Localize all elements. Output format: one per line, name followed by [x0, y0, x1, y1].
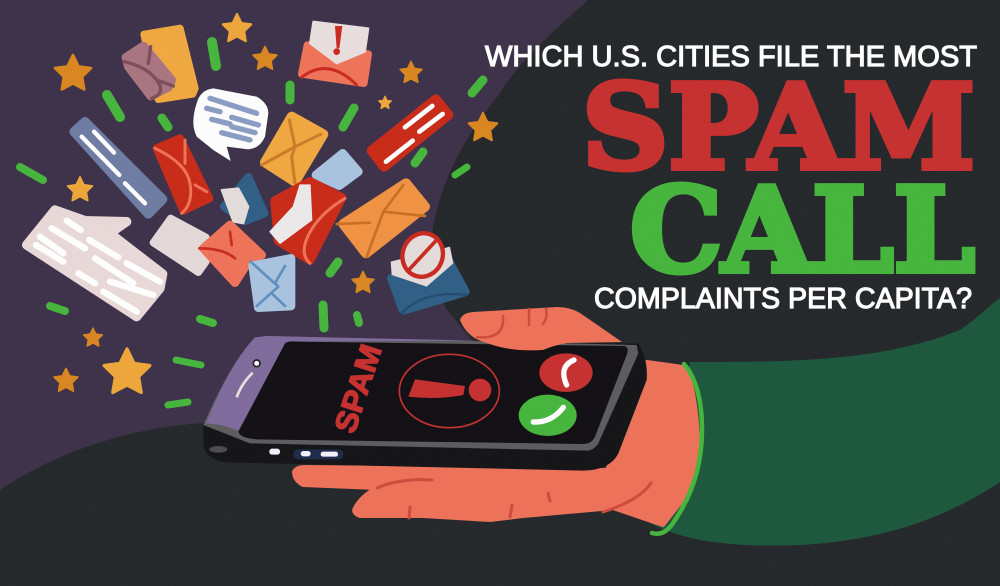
answer call button: [519, 395, 577, 436]
hand creases: [377, 480, 651, 518]
heading line 1: WHICH U.S. CITIES FILE THE MOST: [485, 41, 977, 73]
phone purple bezel: [206, 336, 477, 431]
hand palm and fingers: [294, 362, 698, 525]
title: [485, 41, 977, 315]
yellow paper: [144, 28, 195, 99]
slate message card: [74, 122, 163, 214]
phone: [203, 336, 647, 471]
heading SPAM: SPAM: [582, 60, 975, 196]
stars: [54, 14, 497, 392]
heading line 2: COMPLAINTS PER CAPITA?: [594, 283, 972, 315]
alert circle icon: [399, 354, 499, 428]
large red envelope with paper: [270, 182, 345, 263]
light blue envelope: [251, 258, 291, 308]
mauve envelope: [124, 46, 173, 98]
alert envelope: [302, 22, 368, 85]
blocked envelope: [391, 227, 467, 313]
sleeve: [650, 298, 1000, 546]
phone screen: [238, 341, 628, 444]
purple burst background: [0, 0, 588, 490]
SPAM label on screen: SPAM: [328, 340, 389, 437]
green dashes: [20, 42, 483, 405]
pink speech bubble: [27, 210, 163, 317]
speaker: [237, 373, 253, 397]
decline call button: [539, 353, 593, 392]
dark blue folded envelope: [222, 177, 264, 223]
side buttons: [209, 446, 343, 459]
camera: [253, 360, 260, 367]
white speech bubble: [193, 88, 268, 161]
orange envelope: [337, 183, 425, 257]
red message card: [372, 99, 448, 167]
gold envelope: [262, 117, 323, 183]
light paper: [153, 218, 206, 272]
light blue card: [316, 153, 358, 186]
heading CALL: CALL: [630, 163, 975, 299]
red envelope: [155, 138, 209, 213]
salmon envelope: [199, 225, 262, 283]
thumb: [460, 307, 622, 350]
phone base: [203, 343, 647, 471]
phone top face: [203, 336, 638, 451]
flying messages and envelopes: [27, 22, 467, 317]
cuff line: [652, 364, 702, 534]
